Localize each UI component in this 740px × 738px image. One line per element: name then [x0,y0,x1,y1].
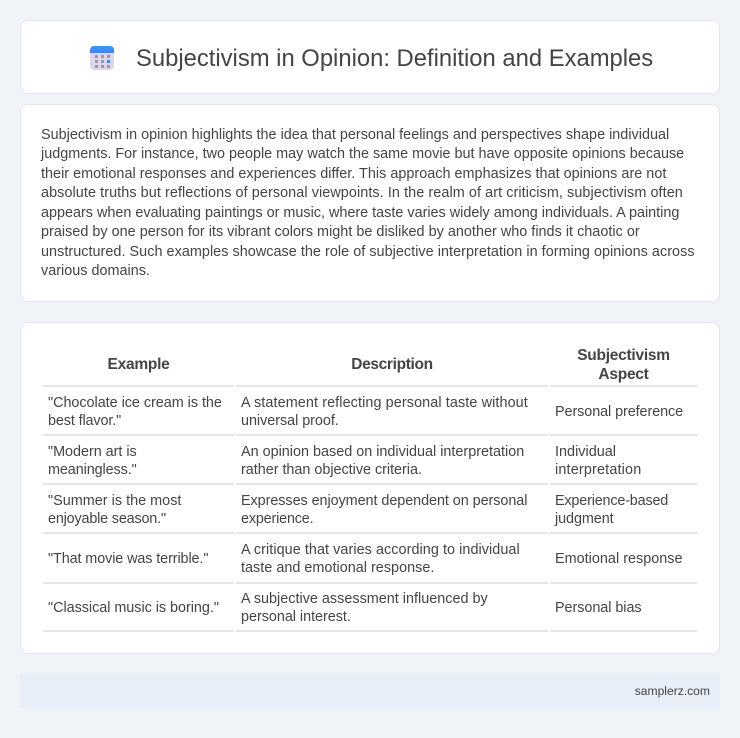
row 2: rather than objective criteria. [241,462,422,478]
panel: introduction text: appears when evaluating paintings or music, where taste varies widely among individuals. A painting [41,205,679,221]
row 1 [48,395,683,429]
panel: introduction text: absolute truths but reflections of personal viewpoints. In the realm of art criticism, subjectivism often [41,185,683,201]
row 4: Emotional response [555,551,683,567]
panel: introduction text: praised by one person for its vibrant colors might be disliked by another who finds it chaotic or [41,224,640,240]
panel: introduction text [20,104,720,302]
footer bar [20,674,720,708]
table header: Aspect [598,366,649,383]
footer text: samplerz.com: samplerz.com [635,684,710,698]
header panel [20,20,720,94]
row 3: Expresses enjoyment dependent on personal [241,493,527,509]
panel: introduction text: judgments. For instance, two people may watch the same movie but have opposite opinions because [41,146,684,162]
row 4 [48,542,683,576]
row 3: experience. [241,511,313,527]
title: Subjectivism in Opinion: Definition and Examples [136,45,653,72]
panel: introduction text: various domains. [41,263,150,279]
row 3: judgment [555,511,614,527]
row 2: Individual [555,444,616,460]
row 3: "Summer is the most [48,493,181,509]
row 2: "Modern art is [48,444,137,460]
row 2: meaningless." [48,462,137,478]
panel: examples table [20,322,720,654]
row 4: taste and emotional response. [241,560,434,576]
row 3: enjoyable season." [48,511,166,527]
row 1: A statement reflecting personal taste without [241,395,528,411]
row 5: "Classical music is boring." [48,600,219,616]
row 3 [48,493,668,527]
row 1: "Chocolate ice cream is the [48,395,222,411]
table header: Description [351,356,433,373]
table header [107,347,670,383]
panel: introduction text: unstructured. Such examples showcase the role of subjective interpretation in forming opinions across [41,244,695,260]
row 5: Personal bias [555,600,642,616]
row 1: best flavor." [48,413,121,429]
table header: Subjectivism [577,347,670,364]
row 2 [48,444,641,478]
table header: Example [107,356,170,373]
panel: introduction text: Subjectivism in opinion highlights the idea that personal feelings and perspectives shape individual [41,127,669,143]
row 5 [48,591,642,625]
row 2: interpretation [555,462,641,478]
row 1: Personal preference [555,404,683,420]
panel: introduction text: their emotional responses and experiences differ. This approach emphasizes that opinions are not [41,166,666,182]
row 5: personal interest. [241,609,351,625]
icon: calendar [90,46,114,70]
row 5: A subjective assessment influenced by [241,591,488,607]
row 3: Experience-based [555,493,668,509]
row 4: A critique that varies according to individual [241,542,520,558]
row 2: An opinion based on individual interpretation [241,444,524,460]
row 4: "That movie was terrible." [48,551,208,567]
row 1: universal proof. [241,413,339,429]
